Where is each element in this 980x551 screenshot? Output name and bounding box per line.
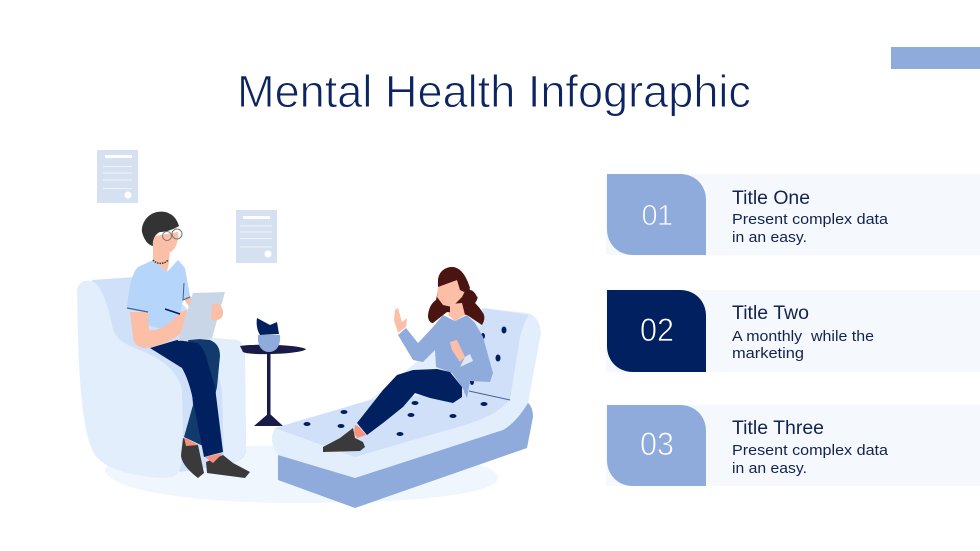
panel: item one: Present complex data	[732, 211, 889, 228]
panel: item one	[606, 174, 980, 255]
backrest	[468, 308, 529, 400]
shirt	[127, 260, 190, 332]
corner accent bar	[891, 47, 980, 69]
title: Mental Health Infographic	[237, 66, 751, 117]
seat	[275, 391, 510, 457]
panel: item two: A monthly while the	[732, 328, 874, 345]
chaise longue	[272, 308, 541, 508]
panel: item one: in an easy.	[732, 229, 807, 246]
sweater	[398, 315, 493, 398]
hair	[142, 212, 179, 246]
near leg	[150, 340, 223, 457]
hand	[211, 304, 223, 320]
panel: item three	[606, 405, 980, 486]
floor shadow	[105, 446, 498, 503]
glasses	[162, 229, 182, 240]
far arm skin	[183, 296, 212, 322]
shoe	[323, 428, 365, 452]
cushion outline	[272, 308, 541, 478]
raised hand	[394, 308, 407, 333]
panel: item three: in an easy.	[732, 460, 807, 477]
pen	[165, 309, 180, 314]
hair top	[438, 267, 470, 292]
panel: item three: Title Three	[732, 418, 824, 439]
resting hand	[450, 340, 465, 362]
panel: item three: 03	[640, 426, 674, 462]
panel: item one: 01	[642, 200, 673, 232]
arm	[130, 310, 187, 348]
armchair	[77, 277, 246, 478]
sock	[354, 425, 366, 438]
legs	[357, 369, 462, 435]
side table with plant	[240, 318, 306, 426]
illustration: therapy session	[77, 150, 541, 508]
panel: item two: 02	[640, 312, 674, 348]
tufting buttons	[304, 326, 506, 436]
hair back	[428, 267, 484, 325]
base	[278, 402, 533, 508]
far leg	[184, 338, 220, 446]
woman	[323, 267, 493, 452]
panel: item three: Present complex data	[732, 442, 889, 459]
icon: document right	[236, 210, 277, 263]
man	[127, 212, 250, 478]
neck and face	[153, 243, 170, 272]
neck and face	[448, 303, 465, 321]
panel: item two: Title Two	[732, 303, 809, 324]
panel: item one: Title One	[732, 188, 810, 209]
panel: item two	[606, 290, 980, 372]
clipboard	[178, 292, 225, 341]
shoes	[181, 438, 204, 478]
panel: item two: marketing	[732, 345, 804, 362]
tissue cuff	[460, 354, 473, 367]
icon: document left	[97, 150, 138, 203]
